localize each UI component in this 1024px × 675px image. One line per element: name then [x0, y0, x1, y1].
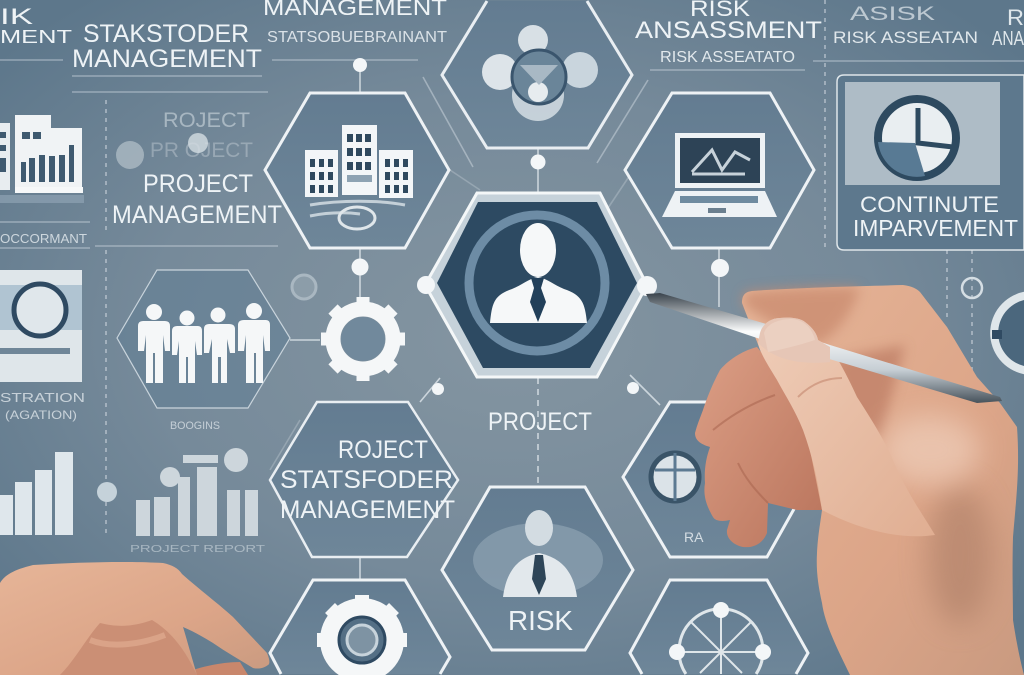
far-left labels: PROJECT REPORT: [130, 544, 265, 555]
heading: stakeholder management left: STAKSTODER: [83, 20, 249, 48]
panel: bottom left gear hexagon: [270, 580, 450, 675]
panel: bottom right network hexagon: [630, 580, 808, 674]
far-left labels: BOOGINS: [170, 420, 220, 432]
panel: central leader hexagon: [425, 193, 647, 377]
far-left labels: STRATION: [0, 390, 85, 405]
heading: risk assessment: RISK ASSEATATO: [660, 49, 795, 66]
heading: right corner: RISK ASSEATAN: [833, 28, 978, 47]
panel: team hexagon: [117, 270, 290, 408]
panel: stakeholder hexagon: ROJECT: [338, 436, 428, 464]
illustration: left hand: [0, 562, 269, 675]
far-left labels: OCCORMANT: [0, 231, 87, 246]
heading: right corner: [833, 4, 1024, 50]
icon: business person: [490, 223, 587, 323]
icon: gears: [482, 25, 598, 121]
heading: project management: ROJECT: [163, 109, 250, 132]
illustration: right hand holding pen: [695, 285, 1024, 675]
heading: risk assessment: ANSASSMENT: [635, 17, 822, 44]
panel: continuous improvement: CONTINUTE: [860, 192, 999, 217]
label: project: PROJECT: [488, 408, 592, 436]
icon: magnifier circle: [14, 284, 66, 336]
far-left labels: MENT: [0, 27, 72, 47]
icon: right edge dial: [990, 292, 1024, 374]
panel: far-left monitor card: [0, 270, 82, 382]
bar chart: lower left: [0, 452, 73, 535]
panel: stakeholder hexagon: [270, 402, 458, 557]
heading: project management: MANAGEMENT: [112, 201, 282, 229]
panel: far-left building card: [0, 115, 84, 203]
heading: project management: PROJECT: [143, 170, 253, 198]
panel: lower right hexagon: [623, 402, 812, 557]
panel: lower right hexagon: RA: [684, 529, 704, 545]
connector nodes: [352, 58, 729, 395]
icon: network globe: [669, 602, 771, 674]
far-left labels: (AGATION): [5, 408, 77, 422]
panel: risk hexagon: RISK: [508, 605, 573, 636]
panel: laptop hexagon: [625, 93, 814, 248]
icon: lens: [651, 453, 699, 501]
thumb: [758, 318, 935, 536]
icon: team of people: [138, 303, 270, 383]
panel: top hexagon: [442, 1, 632, 148]
panel: building hexagon: [265, 93, 449, 248]
heading: management top: [263, 0, 447, 46]
heading: stakeholder management left: MANAGEMENT: [72, 45, 262, 73]
panel: stakeholder hexagon: STATSFODER: [280, 466, 453, 494]
icon: pie chart: [878, 99, 956, 177]
icon: buildings: [305, 125, 413, 229]
heading: management top: STATSOBUEBRAINANT: [267, 29, 447, 46]
icon: gear centre left: [321, 297, 405, 381]
icon: business person: [503, 510, 577, 597]
panel: risk hexagon: [442, 487, 633, 650]
shadow: fingers: [695, 347, 822, 547]
far-left labels: [0, 4, 265, 555]
heading: project management: [112, 109, 282, 229]
heading: risk assessment: [635, 0, 822, 66]
far-left labels: IK: [0, 4, 34, 29]
illustration: pen: [646, 293, 1002, 403]
icon: small badge: [292, 275, 316, 299]
heading: stakeholder management left: [72, 20, 262, 73]
heading: right corner: R: [1007, 5, 1024, 30]
icon: spiral badge: [962, 278, 982, 298]
panel: stakeholder hexagon: MANAGEMENT: [280, 496, 455, 524]
panel: continuous improvement: [837, 75, 1024, 250]
bar chart: faded: [136, 448, 258, 536]
heading: project management: PR OJECT: [150, 139, 253, 162]
panel: continuous improvement: IMPARVEMENT: [853, 215, 1018, 241]
icon: laptop: [662, 133, 777, 217]
icon: small node: [97, 482, 117, 502]
icon: gear: [317, 595, 407, 675]
heading: right corner: ASISK: [850, 4, 935, 25]
